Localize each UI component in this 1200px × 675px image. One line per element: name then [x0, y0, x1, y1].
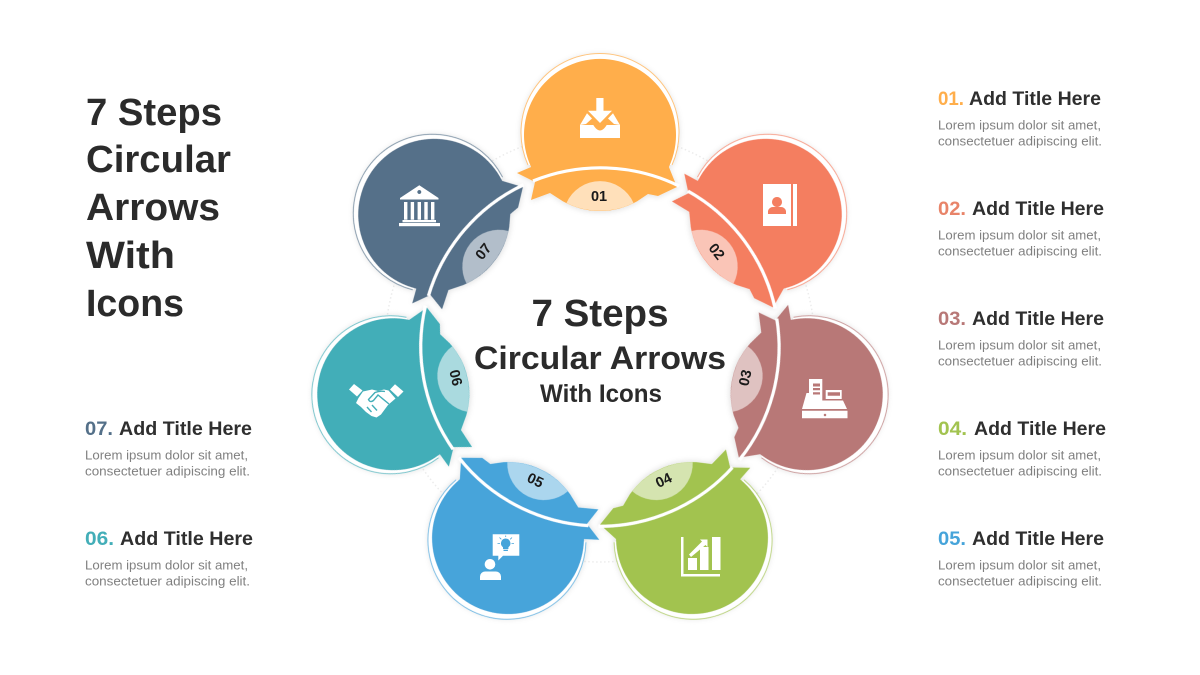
step 6 arrow [296, 300, 486, 493]
center heading: Circular Arrows [474, 340, 726, 376]
heading: left title: With [86, 235, 175, 277]
text block: 02: 02. [938, 199, 966, 220]
text block: 01: consectetuer adipiscing elit. [938, 134, 1102, 148]
icon: cash register [802, 379, 848, 418]
heading: left title: 7 Steps [86, 92, 222, 134]
icon: inbox download [580, 98, 620, 138]
badge numbers: 06 [445, 368, 465, 388]
text block: 02: Lorem ipsum dolor sit amet, [938, 228, 1101, 242]
center heading [474, 293, 726, 408]
text block: 01: 01. [938, 89, 964, 110]
text block: 05: Add Title Here [972, 529, 1104, 550]
badge numbers: 07 [473, 241, 495, 263]
text block: 07: Lorem ipsum dolor sit amet, [85, 448, 248, 462]
text block: 02: consectetuer adipiscing elit. [938, 244, 1102, 258]
badge numbers: 04 [653, 470, 675, 492]
text block: 04: 04. [938, 419, 967, 440]
icon: bank building [399, 185, 440, 226]
text block: 03: 03. [938, 309, 966, 330]
step 7 arrow [319, 102, 543, 327]
heading: left title: Icons [86, 283, 184, 325]
icon: address book [763, 184, 797, 226]
center heading: With Icons [540, 380, 662, 408]
text block: 05 [938, 529, 1104, 588]
heading: left title [86, 92, 231, 325]
badge numbers: 05 [524, 470, 546, 492]
text block: 06: consectetuer adipiscing elit. [85, 574, 250, 588]
text block: 03: Lorem ipsum dolor sit amet, [938, 338, 1101, 352]
heading: left title: Arrows [86, 187, 220, 229]
text block: 03: Add Title Here [972, 309, 1104, 330]
icon: handshake [349, 384, 404, 418]
step 4 arrow [588, 434, 802, 646]
text block: 06 [85, 529, 253, 588]
text block: 07: 07. [85, 419, 113, 440]
text block: 04: Lorem ipsum dolor sit amet, [938, 448, 1101, 462]
step 2 arrow [655, 99, 879, 324]
step 5 arrow [401, 435, 616, 647]
text block: 05: consectetuer adipiscing elit. [938, 574, 1102, 588]
text block: 05: 05. [938, 529, 966, 550]
text block: 03 [938, 309, 1104, 368]
text block: 07 [85, 419, 252, 478]
icon: growth chart [681, 537, 720, 576]
badge numbers: 03 [736, 368, 756, 388]
text block: 06: 06. [85, 529, 114, 550]
text block: 04 [938, 419, 1106, 478]
icon: person with idea bubble [480, 534, 519, 580]
badge numbers: 01 [591, 189, 607, 205]
text block: 06: Lorem ipsum dolor sit amet, [85, 558, 248, 572]
text block: 03: consectetuer adipiscing elit. [938, 354, 1102, 368]
badge numbers: 02 [705, 241, 727, 263]
step 1 arrow [517, 53, 679, 211]
text block: 07: Add Title Here [119, 419, 252, 440]
text block: 01 [938, 89, 1102, 148]
text block: 06: Add Title Here [120, 529, 253, 550]
text block: 04: consectetuer adipiscing elit. [938, 464, 1102, 478]
text block: 02: Add Title Here [972, 199, 1104, 220]
center heading: 7 Steps [532, 293, 668, 335]
text block: 02 [938, 199, 1104, 258]
text block: 04: Add Title Here [974, 419, 1106, 440]
heading: left title: Circular [86, 139, 231, 181]
text block: 05: Lorem ipsum dolor sit amet, [938, 558, 1101, 572]
text block: 01: Add Title Here [969, 89, 1101, 110]
text block: 01: Lorem ipsum dolor sit amet, [938, 118, 1101, 132]
step 3 arrow [715, 296, 905, 489]
text block: 07: consectetuer adipiscing elit. [85, 464, 250, 478]
badge numbers [445, 189, 756, 492]
